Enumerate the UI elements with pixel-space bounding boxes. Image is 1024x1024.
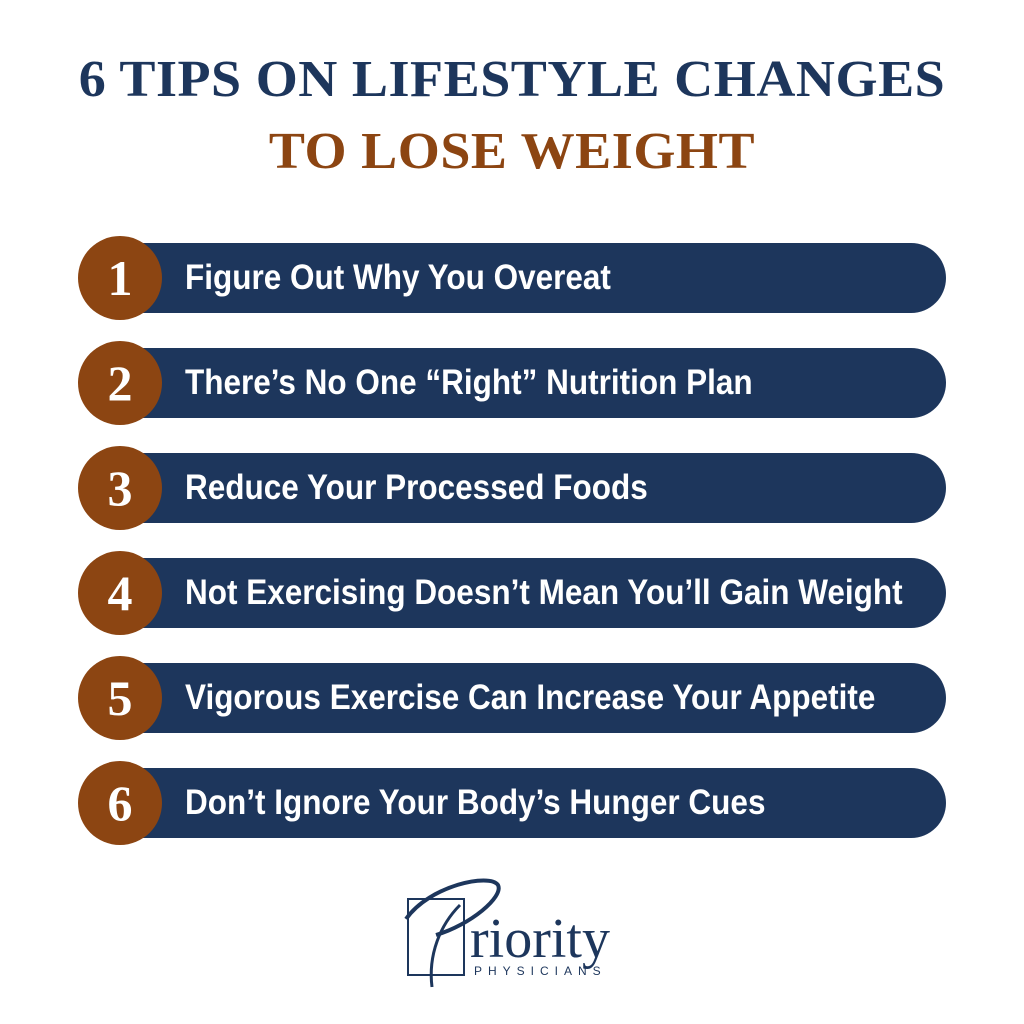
tip 4 [78, 551, 946, 635]
tip 6: Don’t Ignore Your Body’s Hunger Cues [185, 783, 765, 822]
tip 3: 3 [108, 460, 132, 516]
logo: PHYSICIANS [474, 964, 607, 978]
tip 1 [78, 236, 946, 320]
tip 2: 2 [108, 355, 132, 411]
title line 1: 6 TIPS ON LIFESTYLE CHANGES [79, 51, 945, 108]
title line 2: TO LOSE WEIGHT [269, 123, 755, 180]
tip 1: 1 [108, 250, 132, 306]
logo: riority [470, 908, 610, 970]
tip 6 [78, 761, 946, 845]
tip 5: Vigorous Exercise Can Increase Your Appetite [185, 678, 875, 717]
tip 1: Figure Out Why You Overeat [185, 258, 611, 297]
tip 4: 4 [108, 565, 132, 621]
tip 2: There’s No One “Right” Nutrition Plan [185, 363, 753, 402]
logo [404, 878, 610, 988]
tip 3: Reduce Your Processed Foods [185, 468, 648, 507]
tip 2 [78, 341, 946, 425]
tip 4: Not Exercising Doesn’t Mean You’ll Gain Weight [185, 573, 903, 612]
tip 5: 5 [108, 670, 132, 726]
tip 3 [78, 446, 946, 530]
tip 6: 6 [108, 775, 132, 831]
tip 5 [78, 656, 946, 740]
